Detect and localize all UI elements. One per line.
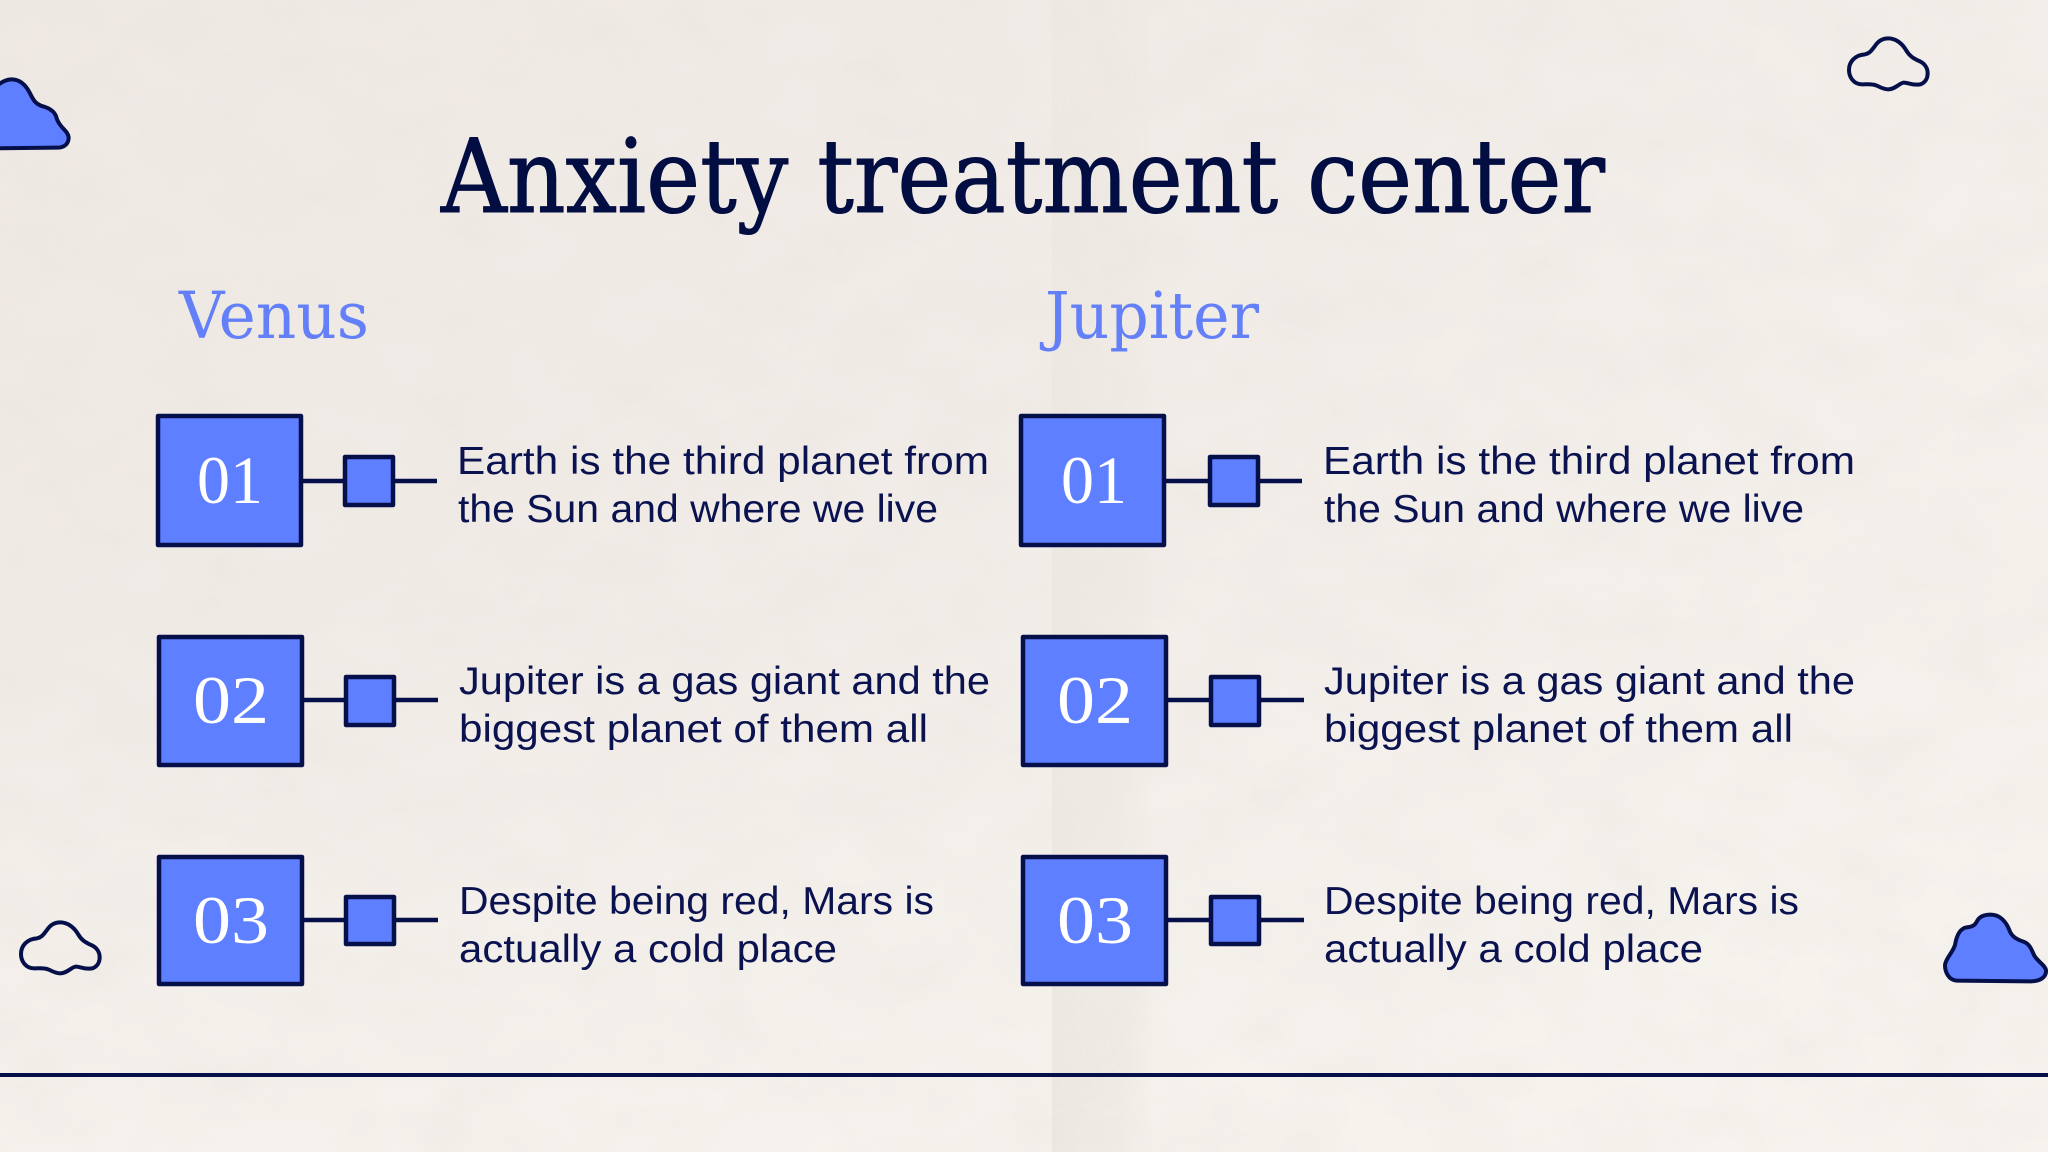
node square [345, 457, 393, 505]
number box 03 [1023, 857, 1166, 984]
description: Despite being red, Mars is [1324, 880, 1799, 923]
item: Venus 02 [159, 637, 990, 765]
connector [304, 698, 438, 702]
number box 02 [159, 637, 302, 765]
item: Jupiter 03 [1023, 857, 1799, 984]
title: Anxiety treatment center [440, 118, 1605, 237]
number: 03 [1057, 882, 1133, 958]
number box 01 [1021, 416, 1164, 545]
bottom rule [0, 1073, 2048, 1077]
description: Earth is the third planet from [457, 440, 989, 483]
node square [346, 677, 394, 725]
icon: blue cloud bottom right [1945, 915, 2046, 981]
description: actually a cold place [459, 928, 837, 971]
icon: outline cloud top right [1849, 38, 1928, 89]
panel: Jupiter column [1021, 279, 1855, 984]
icon: outline cloud bottom left [21, 922, 100, 973]
heading: Jupiter: Jupiter [1039, 279, 1260, 354]
number box 03 [159, 857, 302, 984]
number: 03 [193, 882, 269, 958]
description: Earth is the third planet from [1323, 440, 1855, 483]
panel: Venus column [158, 279, 990, 984]
node square [346, 897, 394, 944]
number: 02 [1057, 662, 1133, 738]
description: Jupiter is a gas giant and the [459, 660, 990, 703]
item: Venus 01 [158, 416, 989, 545]
description: actually a cold place [1324, 928, 1703, 971]
node square [1210, 457, 1258, 505]
item: Jupiter 01 [1021, 416, 1855, 545]
number box 01 [158, 416, 301, 545]
icon: blue cloud top left [0, 79, 69, 148]
number: 01 [197, 442, 263, 518]
number box 02 [1023, 637, 1166, 765]
description: biggest planet of them all [1324, 708, 1793, 751]
item: Jupiter 02 [1023, 637, 1855, 765]
number: 02 [193, 662, 269, 738]
connector [303, 479, 437, 483]
description: Despite being red, Mars is [459, 880, 934, 923]
connector [1167, 918, 1304, 922]
connector [1167, 698, 1304, 702]
description: Jupiter is a gas giant and the [1324, 660, 1855, 703]
connector [1165, 479, 1302, 483]
number: 01 [1061, 442, 1127, 518]
description: the Sun and where we live [1324, 488, 1804, 531]
description: the Sun and where we live [458, 488, 938, 531]
item: Venus 03 [159, 857, 934, 984]
heading: Venus: Venus [178, 279, 369, 354]
node square [1211, 897, 1259, 944]
node square [1211, 677, 1259, 725]
description: biggest planet of them all [459, 708, 928, 751]
connector [304, 918, 438, 922]
